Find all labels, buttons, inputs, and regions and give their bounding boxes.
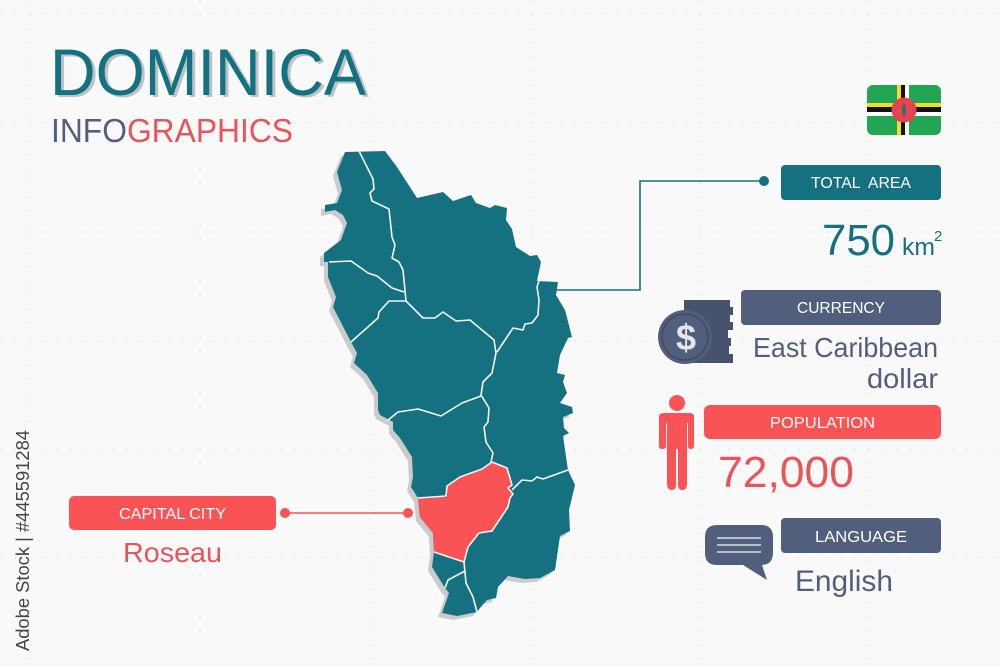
value: currency: dollar: [867, 363, 938, 394]
value: currency: East Caribbean: [753, 332, 938, 363]
label: population: [704, 405, 941, 439]
connector: total area: [556, 176, 769, 290]
value: language: English: [795, 565, 893, 598]
stock side label: Adobe Stock | #445591284: [13, 430, 33, 651]
label: population: POPULATION: [770, 415, 875, 432]
icon: coin stack: [658, 300, 733, 364]
connector: capital city: [280, 508, 413, 518]
label: currency: CURRENCY: [797, 300, 885, 317]
label: total area: [781, 165, 941, 200]
icon: coin stack: $: [676, 317, 696, 358]
title: DOMINICA: [53, 37, 369, 111]
label: language: [781, 518, 941, 553]
value: population: 72,000: [718, 448, 854, 497]
value: total area: km: [902, 234, 935, 261]
value: total area: 750: [822, 216, 895, 265]
icon: speech bubble: [705, 525, 773, 580]
value: total area: 2: [934, 228, 942, 245]
value: capital city: Roseau: [123, 537, 222, 568]
capital region: Roseau: [418, 462, 513, 562]
label: capital city: CAPITAL CITY: [119, 506, 226, 523]
subtitle: INFOGRAPHICS: [51, 112, 293, 149]
value: total area: [822, 216, 942, 265]
label: total area: TOTAL AREA: [811, 175, 911, 192]
icon: flag of Dominica: [867, 85, 941, 135]
title: DOMINICA: [50, 35, 366, 109]
label: language: LANGUAGE: [815, 529, 907, 546]
value: currency: [753, 332, 938, 394]
label: currency: [741, 290, 941, 325]
region borders: [329, 151, 568, 612]
map of Dominica: [320, 151, 575, 620]
label: capital city: [69, 496, 276, 530]
icon: person: [659, 395, 694, 490]
